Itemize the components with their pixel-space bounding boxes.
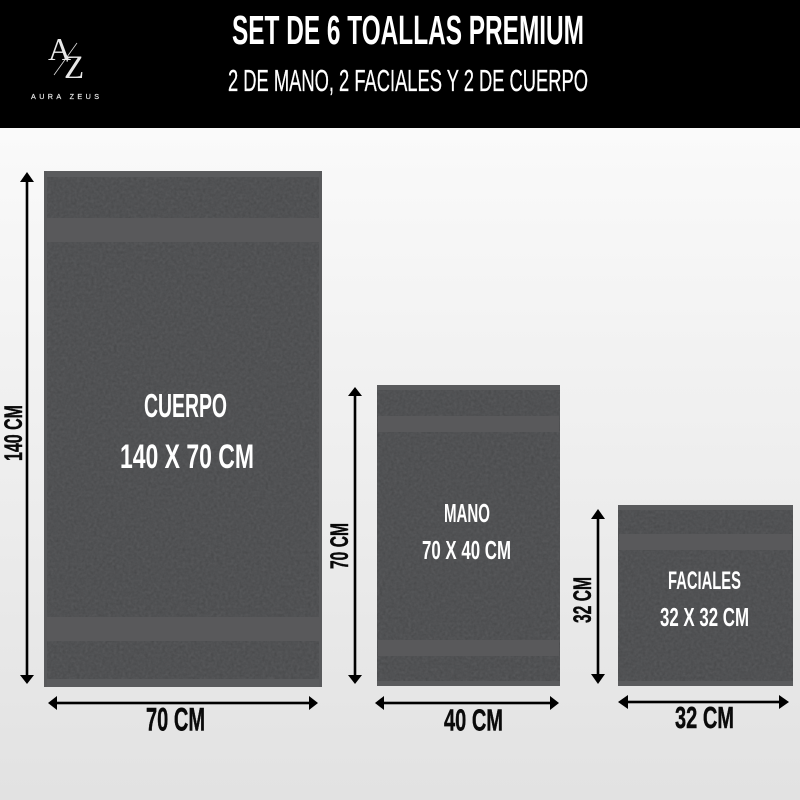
dimension: 70 cm height: 70 CM	[326, 523, 354, 569]
dimension: 32 cm height: 32 CM	[569, 577, 597, 623]
logo: Aura Zeus: AURA ZEUS	[31, 92, 99, 101]
label: faciales size: 32 X 32 CM	[660, 602, 749, 632]
arrow: cuerpo height	[20, 172, 34, 684]
towel: cuerpo	[44, 171, 322, 687]
label: cuerpo size: 140 X 70 CM	[120, 438, 254, 476]
logo: Aura Zeus: A	[48, 31, 71, 67]
dimension: 32 cm: 32 CM	[675, 700, 734, 735]
header band	[0, 0, 800, 128]
arrow: mano height	[348, 387, 362, 684]
label: mano: MANO	[444, 498, 490, 528]
dimension: 140 cm: 140 CM	[0, 405, 28, 461]
logo: Aura Zeus	[31, 31, 99, 101]
logo: Aura Zeus: Z	[64, 50, 84, 86]
label: mano size: 70 X 40 CM	[422, 535, 511, 565]
arrow: mano width	[375, 696, 559, 710]
label: cuerpo: CUERPO	[144, 387, 227, 424]
dimension: 40 cm: 40 CM	[444, 702, 503, 738]
arrow: faciales height	[591, 509, 605, 684]
towel: faciales	[618, 505, 793, 686]
label: faciales: FACIALES	[668, 567, 741, 595]
arrow: cuerpo width	[48, 696, 318, 710]
dimension: 70 cm: 70 CM	[146, 702, 205, 738]
towel: mano	[377, 385, 560, 686]
arrow: faciales width	[618, 695, 789, 709]
